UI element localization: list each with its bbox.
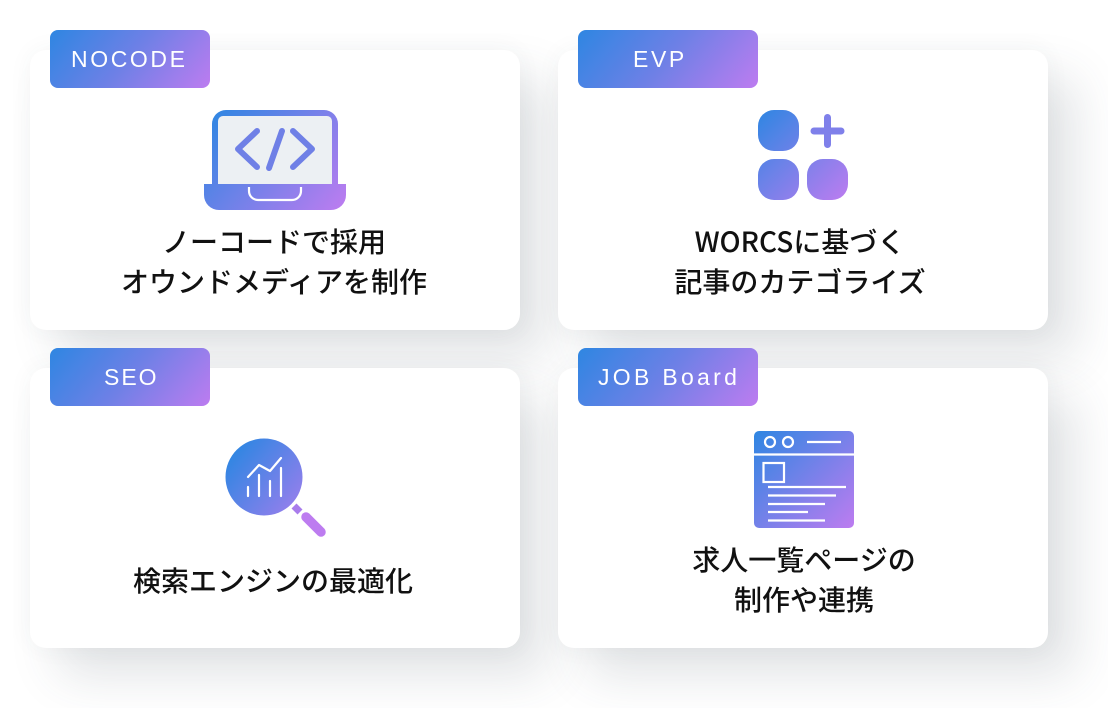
icon: squares and plus (758, 110, 848, 200)
tag: NOCODE (50, 30, 210, 88)
text: NOCODE description: ノーコードで採用 (162, 221, 386, 261)
text: SEO description: 検索エンジンの最適化 (133, 560, 413, 600)
text: NOCODE description: オウンドメディアを制作 (121, 261, 427, 301)
text: EVP description: WORCSに基づく (695, 221, 905, 261)
tag: NOCODE: NOCODE (71, 46, 188, 72)
panel: NOCODE (30, 50, 520, 330)
text: NOCODE description (121, 221, 427, 301)
text: JOB Board description: 制作や連携 (734, 579, 874, 619)
text: EVP description: 記事のカテゴライズ (674, 261, 926, 301)
text: JOB Board description (692, 539, 916, 619)
panel: EVP (558, 50, 1048, 330)
icon: magnifier with chart (226, 438, 326, 537)
text: EVP description (674, 221, 926, 301)
panel: JOB Board (558, 368, 1048, 648)
text: JOB Board description: 求人一覧ページの (692, 539, 916, 579)
tag: SEO (50, 348, 210, 406)
tag: SEO: SEO (104, 364, 159, 390)
panel: SEO (30, 368, 520, 648)
icon: browser window (754, 431, 854, 528)
tag: EVP (578, 30, 758, 88)
tag: EVP: EVP (633, 46, 687, 72)
icon: laptop with code (204, 110, 346, 210)
tag: JOB Board: JOB Board (598, 364, 740, 390)
tag: JOB Board (578, 348, 758, 406)
